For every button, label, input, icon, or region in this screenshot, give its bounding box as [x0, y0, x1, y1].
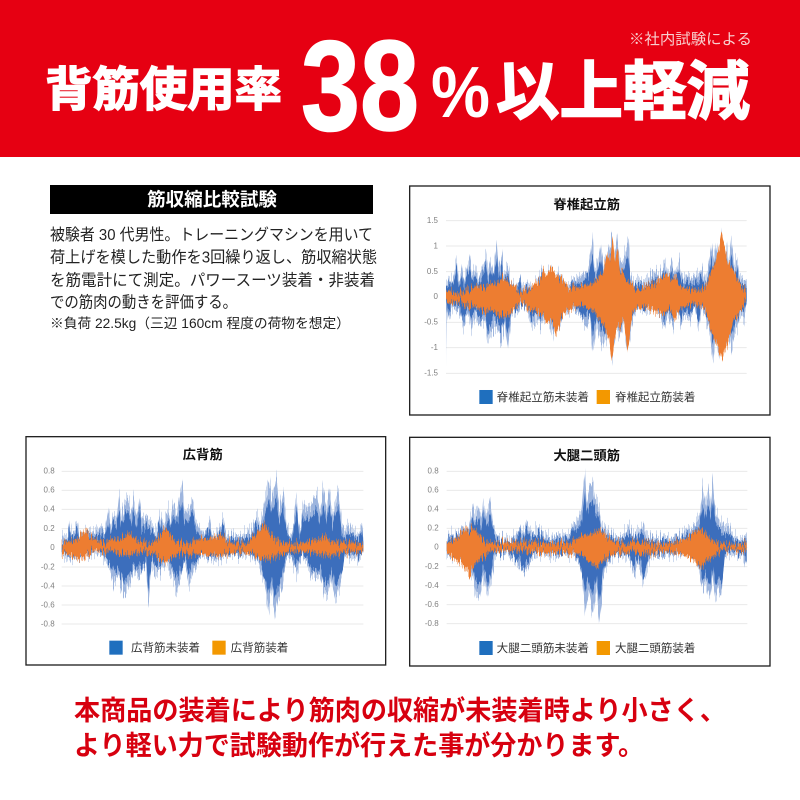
axis labels and grid: 0 [434, 292, 439, 301]
header percent sign: % [431, 53, 490, 133]
waveform: without suit [447, 471, 747, 623]
conclusion text: 本商品の装着により筋肉の収縮が未装着時より小さく、 [74, 695, 726, 726]
waveform: without suit [62, 477, 363, 617]
panel: chart biceps femoris [410, 437, 770, 666]
panel: chart erector spinae [410, 186, 770, 415]
test heading bar [50, 185, 373, 214]
test description text: 荷上げを模した動作を3回繰り返し、筋収縮状態 [50, 248, 377, 266]
legend: 広背筋装着 [231, 641, 288, 655]
legend: 大腿二頭筋未装着 [497, 641, 589, 655]
header footnote: ※社内試験による [629, 31, 752, 48]
chart title: 広背筋 [183, 446, 223, 462]
legend: 脊椎起立筋装着 [615, 390, 695, 404]
test heading bar: 筋収縮比較試験 [147, 189, 277, 210]
axis labels and grid: 0 [434, 543, 439, 552]
legend: 脊椎起立筋未装着 [497, 390, 589, 404]
test description text [50, 226, 377, 331]
test description text: 被験者 30 代男性。トレーニングマシンを用いて [50, 226, 373, 244]
legend: 大腿二頭筋装着 [615, 641, 695, 655]
header figure: 38: 38 [301, 15, 419, 158]
chart title: 大腿二頭筋 [553, 447, 620, 463]
axis labels and grid: -0.4 [41, 581, 55, 590]
axis labels and grid: 1 [434, 241, 439, 250]
axis labels and grid: 0.8 [428, 467, 439, 476]
axis labels and grid: -0.5 [424, 318, 439, 327]
axis labels and grid: -1 [431, 343, 439, 352]
header label: back muscle usage rate: 背筋使用率 [45, 63, 282, 116]
test description text: ※負荷 22.5kg（三辺 160cm 程度の荷物を想定） [50, 316, 350, 331]
panel: test description [50, 185, 377, 331]
axis labels and grid: -0.6 [41, 600, 55, 609]
axis labels and grid [424, 216, 747, 378]
axis labels and grid: -0.2 [41, 562, 55, 571]
legend: 広背筋未装着 [131, 641, 200, 655]
legend [109, 641, 288, 655]
axis labels and grid: -0.8 [41, 619, 55, 628]
panel: chart latissimus dorsi [26, 437, 386, 665]
axis labels and grid: -0.6 [425, 600, 439, 609]
axis labels and grid: 0.6 [44, 486, 55, 495]
axis labels and grid: -1.5 [424, 369, 439, 378]
legend [479, 641, 695, 655]
test description text: を筋電計にて測定。パワースーツ装着・非装着 [50, 272, 375, 290]
waveform: with suit [446, 232, 746, 362]
header banner [0, 0, 800, 158]
axis labels and grid [425, 467, 747, 628]
axis labels and grid: 0.6 [428, 486, 439, 495]
axis labels and grid: 0 [50, 543, 55, 552]
waveform: without suit [446, 233, 747, 373]
legend [479, 390, 695, 404]
axis labels and grid: 0.5 [427, 267, 439, 276]
axis labels and grid: -0.8 [425, 619, 439, 628]
conclusion text [74, 695, 726, 761]
axis labels and grid [41, 467, 363, 628]
axis labels and grid: 0.4 [44, 505, 55, 514]
axis labels and grid: 0.2 [428, 524, 439, 533]
chart title: 脊椎起立筋 [553, 196, 620, 212]
waveform: with suit [447, 527, 747, 575]
header label: or more reduction: 以上軽減 [496, 56, 750, 128]
conclusion text: より軽い力で試験動作が行えた事が分かります。 [74, 730, 644, 761]
axis labels and grid: 0.2 [44, 524, 55, 533]
waveform: with suit [62, 525, 363, 563]
axis labels and grid: -0.2 [425, 562, 439, 571]
test description text: での筋肉の動きを評価する。 [50, 294, 237, 312]
axis labels and grid: 0.8 [44, 467, 55, 476]
axis labels and grid: 1.5 [427, 216, 439, 225]
axis labels and grid: 0.4 [428, 505, 439, 514]
axis labels and grid: -0.4 [425, 581, 439, 590]
